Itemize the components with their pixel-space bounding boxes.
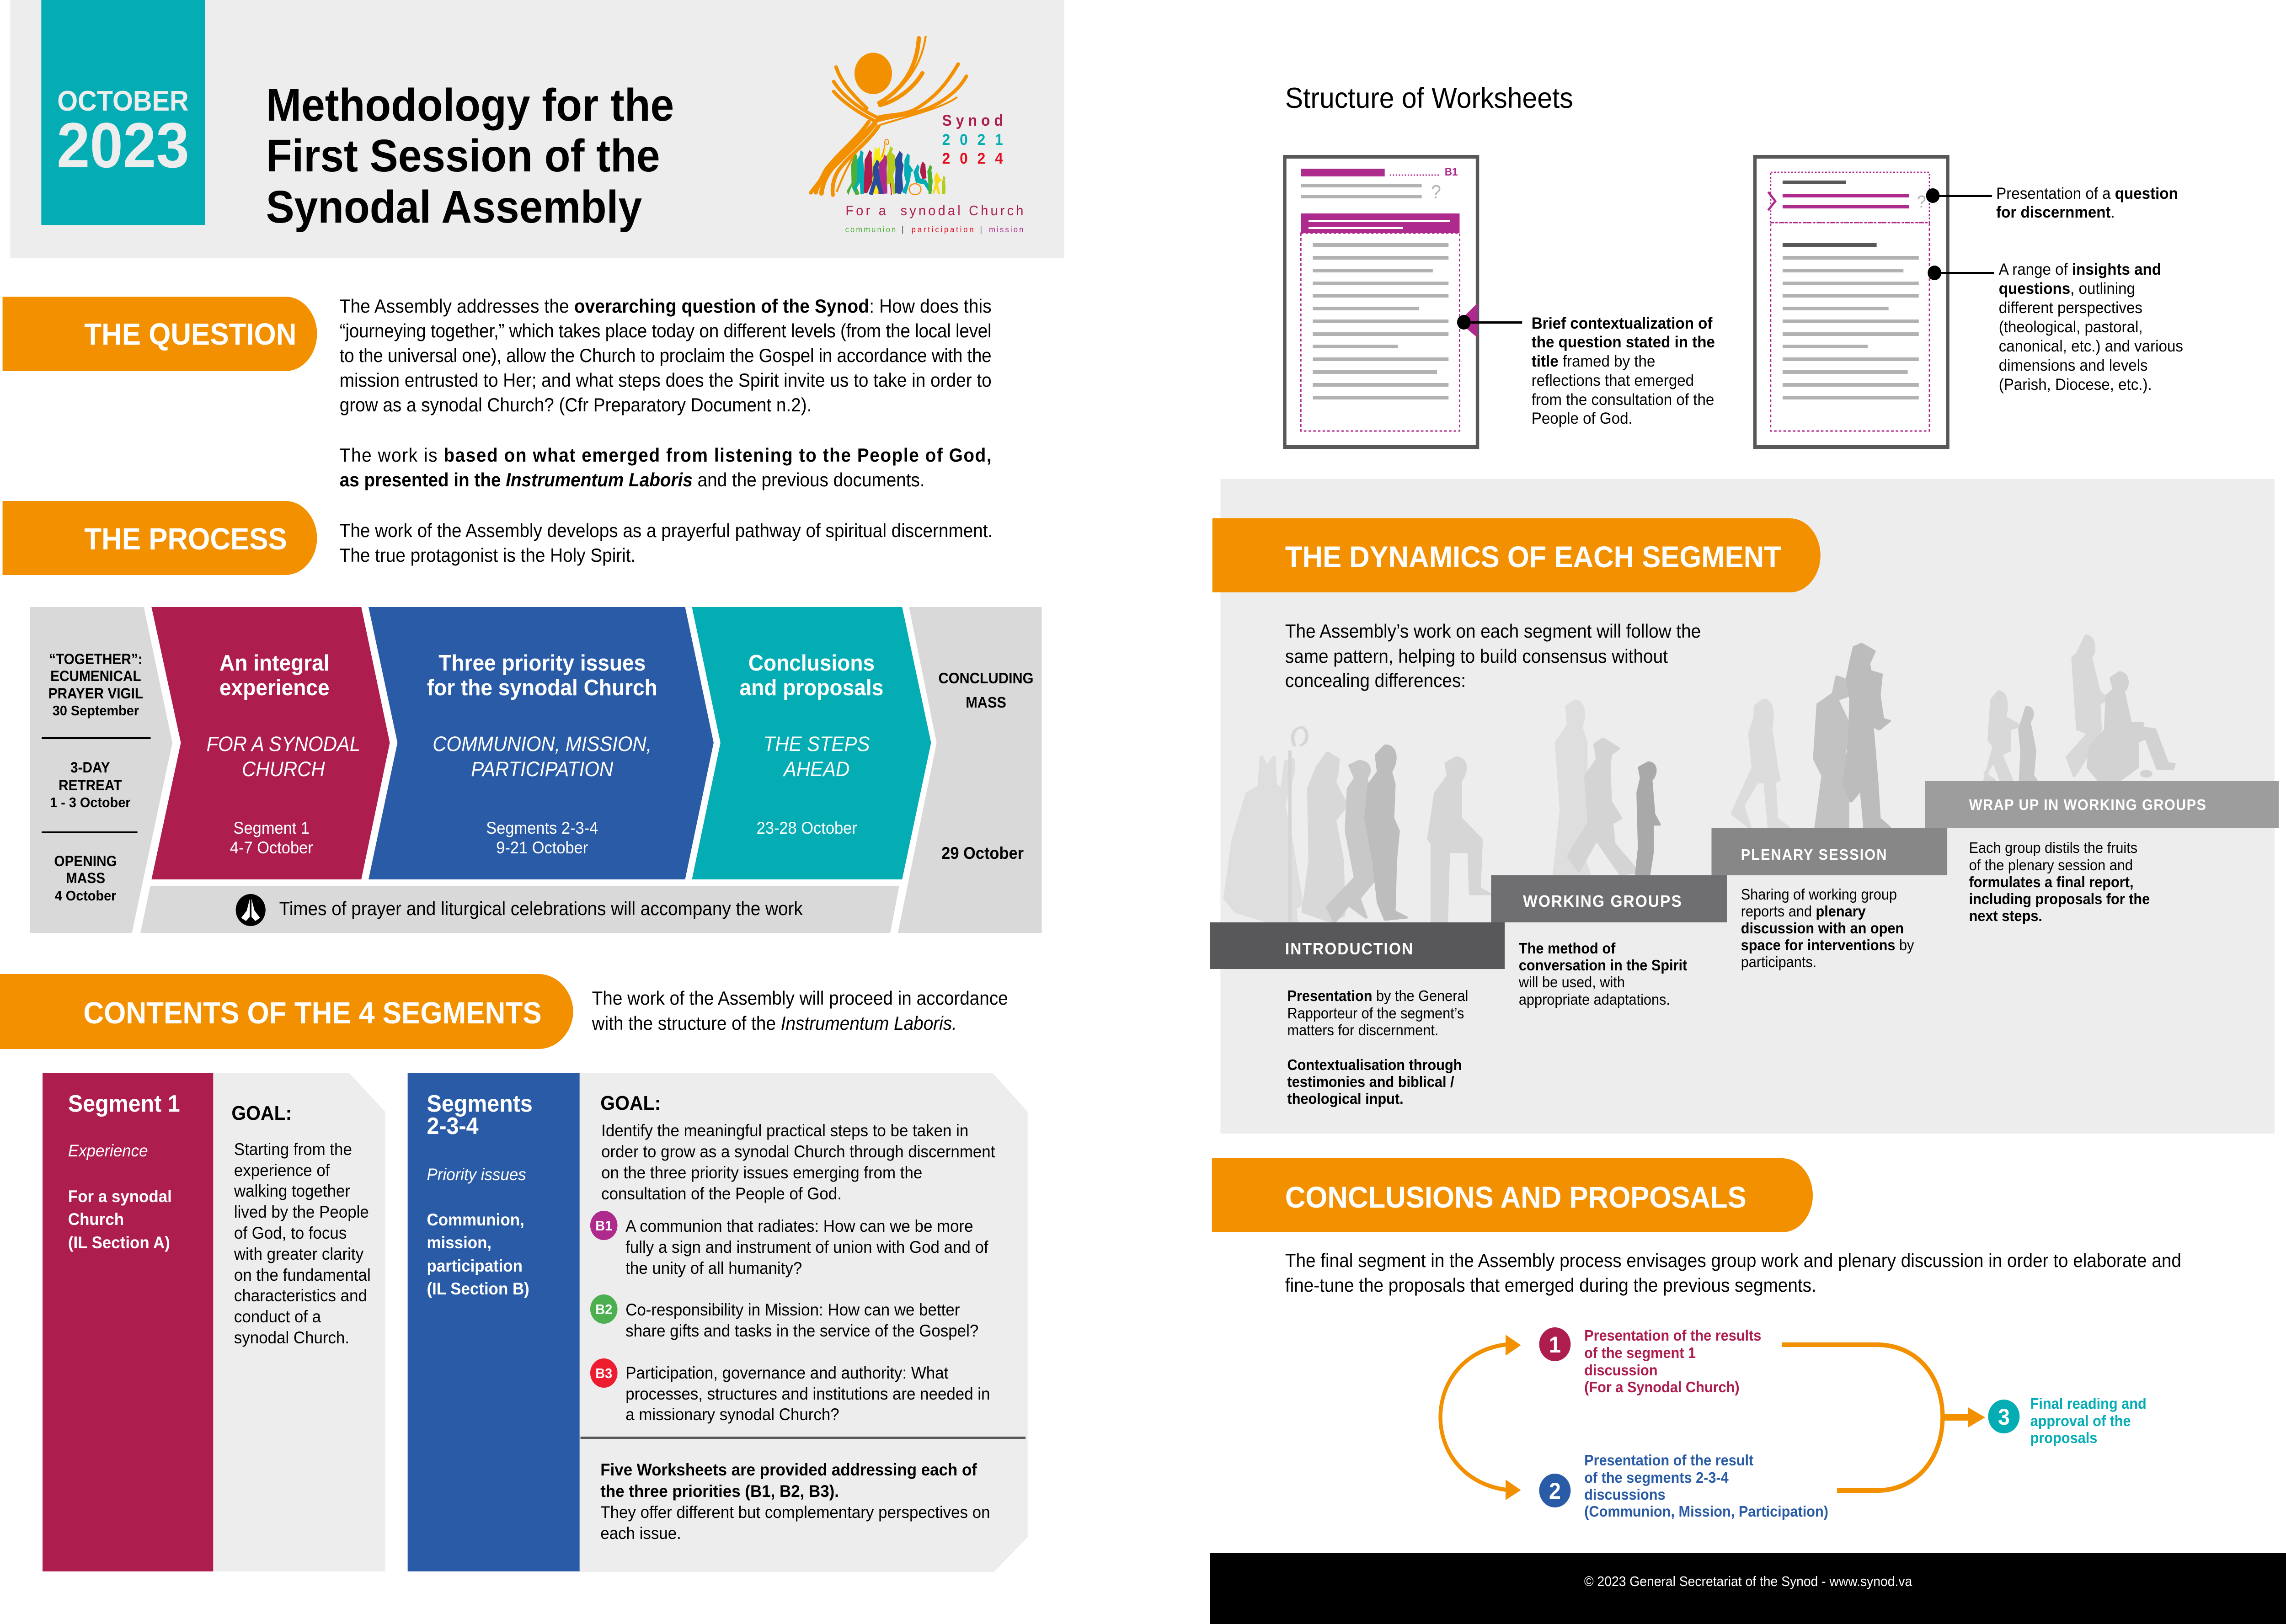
- panel: dynamics of each segment: [1210, 479, 2279, 1134]
- text block: segments goal: consultation of the People of God.: [601, 1184, 842, 1203]
- worksheet diagram 1: B1: [1445, 165, 1458, 178]
- step 2: of the segments 2-3-4: [1584, 1469, 1729, 1486]
- panel: segments 2-3-4 arrow: 9-21 October: [496, 838, 588, 857]
- panel: segment 1: GOAL:: [231, 1102, 292, 1124]
- text block: contents intro: with the structure of the Instrumentum Laboris.: [592, 1013, 957, 1034]
- step 3: approval of the: [2030, 1412, 2131, 1429]
- step 1: of the segment 1: [1584, 1344, 1696, 1361]
- panel: segments 2-3-4: mission,: [427, 1233, 491, 1252]
- process diagram: [30, 607, 1042, 933]
- title: First Session of the: [266, 131, 660, 181]
- panel: concluding mass: CONCLUDING: [939, 670, 1034, 687]
- step 1: Presentation of the results: [1584, 1327, 1761, 1344]
- logo: Synod 2021-2024: mission: [989, 224, 1023, 234]
- text block: the question: “journeying together,” which takes place today on different levels (from the local level: [340, 320, 992, 341]
- panel: segment 1 arrow: An integral: [219, 651, 330, 676]
- logo: Synod 2021-2024: participation: [912, 224, 974, 234]
- panel: segments 2-3-4: [408, 1073, 1028, 1572]
- step: plenary session: reports and plenary: [1741, 903, 1866, 920]
- text block: the question: to the universal one), allow the Church to proclaim the Gospel in accordance with the: [340, 345, 992, 366]
- step 1: discussion: [1584, 1362, 1658, 1379]
- priority B1: A communion that radiates: How can we be more: [625, 1216, 973, 1235]
- worksheet diagram 1: [1285, 157, 1522, 447]
- priority B1: B1: [595, 1218, 612, 1234]
- priority B2: [590, 1294, 978, 1340]
- step: wrap up in working groups: next steps.: [1969, 907, 2042, 924]
- step 2: 2: [1549, 1478, 1561, 1504]
- text block: dynamics intro: concealing differences:: [1285, 670, 1466, 691]
- worksheet diagram 2: [1755, 157, 1994, 447]
- text block: contents intro: The work of the Assembly will proceed in accordance: [592, 988, 1008, 1009]
- panel: before the segments: 4 October: [55, 888, 117, 904]
- worksheet callout 1: People of God.: [1532, 410, 1633, 427]
- worksheet callout 2: [1996, 185, 2178, 221]
- worksheet callout 3: (theological, pastoral,: [1999, 318, 2143, 336]
- panel: conclusions arrow: Conclusions: [748, 651, 875, 676]
- step: plenary session: PLENARY SESSION: [1741, 846, 1887, 863]
- panel: segment 1 arrow: experience: [219, 676, 330, 700]
- worksheet callout 3: (Parish, Diocese, etc.).: [1999, 376, 2152, 394]
- panel: before the segments: 1 - 3 October: [50, 795, 131, 810]
- arrow: left loop: [1441, 1335, 1521, 1500]
- priority B1: [590, 1211, 989, 1278]
- panel: segments 2-3-4: Communion,: [427, 1210, 524, 1229]
- logo: Synod 2021-2024: |: [902, 224, 904, 234]
- text block: segment 1 goal: lived by the People: [234, 1202, 369, 1221]
- panel: segments 2-3-4 arrow: [369, 607, 714, 879]
- text block: segment 1 goal: of God, to focus: [234, 1223, 347, 1242]
- step: working groups: will be used, with: [1518, 974, 1625, 990]
- step: introduction: [1210, 922, 1505, 1107]
- conclusions flow diagram: [1441, 1327, 2147, 1520]
- panel: concluding mass: 29 October: [941, 844, 1024, 863]
- text block: the process: [340, 520, 993, 566]
- heading pill: contents of the 4 segments: [0, 974, 573, 1049]
- text block: conclusions: fine-tune the proposals that emerged during the previous segments.: [1285, 1275, 1816, 1296]
- text block: the process: The true protagonist is the Holy Spirit.: [340, 545, 636, 566]
- date box: [41, 0, 205, 225]
- step: introduction: Contextualisation through: [1287, 1056, 1462, 1073]
- text block: segments goal: Identify the meaningful practical steps to be taken in: [601, 1121, 968, 1140]
- panel: before the segments: 30 September: [53, 703, 139, 719]
- panel: segments 2-3-4: 2-3-4: [427, 1113, 479, 1139]
- text block: segment 1 goal: experience of: [234, 1161, 330, 1180]
- heading pill: contents of the 4 segments: CONTENTS OF THE 4 SEGMENTS: [83, 996, 542, 1030]
- step: working groups: The method of: [1519, 940, 1616, 957]
- priority B2: B2: [595, 1302, 612, 1317]
- panel: segments 2-3-4 arrow: Segments 2-3-4: [486, 819, 598, 837]
- panel: segment 1 arrow: [151, 607, 390, 879]
- worksheet diagram 1: ?: [1431, 181, 1441, 202]
- panel: prayer strip: Times of prayer and liturgical celebrations will accompany the work: [279, 898, 803, 919]
- worksheet callout 1: from the consultation of the: [1532, 391, 1714, 409]
- text block: segment 1 goal: characteristics and: [234, 1286, 367, 1305]
- worksheet callout 1: Brief contextualization of: [1532, 314, 1713, 332]
- step: wrap up in working groups: WRAP UP IN WORKING GROUPS: [1969, 796, 2206, 813]
- text block: the question: grow as a synodal Church? (Cfr Preparatory Document n.2).: [340, 394, 812, 415]
- logo: Synod 2021-2024: [811, 37, 1023, 234]
- panel: segment 1 arrow: CHURCH: [242, 758, 325, 781]
- priority B3: B3: [595, 1366, 612, 1381]
- worksheet callout 3: dimensions and levels: [1999, 357, 2148, 374]
- step 3: proposals: [2030, 1429, 2097, 1446]
- step 1: 1: [1549, 1332, 1561, 1358]
- panel: before the segments: OPENING: [54, 853, 117, 869]
- date box: 2023: [57, 110, 189, 181]
- worksheet diagram 2: ?: [1917, 192, 1926, 211]
- text block: segment 1 goal: synodal Church.: [234, 1328, 349, 1347]
- panel: segments 2-3-4: Segments: [427, 1090, 533, 1117]
- worksheet callout 1: [1532, 314, 1715, 427]
- worksheet callout 2: for discernment.: [1996, 203, 2115, 221]
- worksheet callout 3: A range of insights and: [1999, 261, 2161, 278]
- step: plenary session: [1711, 828, 1947, 970]
- text block: five worksheets: the three priorities (B1, B2, B3).: [600, 1481, 839, 1501]
- arrow: right loop to final step: [1782, 1345, 1985, 1491]
- panel: segment 1 arrow: Segment 1: [234, 819, 310, 837]
- panel: before the segments: 3-DAY: [70, 759, 110, 776]
- text block: conclusions: [1285, 1250, 2181, 1296]
- step: plenary session: Sharing of working group: [1741, 886, 1897, 903]
- priority B3: Participation, governance and authority: What: [625, 1363, 948, 1382]
- text block: dynamics intro: same pattern, helping to build consensus without: [1285, 646, 1668, 667]
- panel: conclusions arrow: [692, 607, 931, 879]
- title: Methodology for the: [266, 80, 674, 131]
- panel: segment 1: For a synodal: [68, 1187, 172, 1206]
- panel: segment 1 arrow: 4-7 October: [230, 838, 313, 857]
- priority B2: Co-responsibility in Mission: How can we better: [625, 1300, 960, 1319]
- step: plenary session: participants.: [1741, 953, 1816, 970]
- text block: segment 1 goal: conduct of a: [234, 1307, 321, 1326]
- text block: contents intro: [592, 988, 1008, 1034]
- title: Synodal Assembly: [266, 182, 642, 233]
- text block: dynamics intro: The Assembly’s work on each segment will follow the: [1285, 621, 1701, 642]
- priority B1: the unity of all humanity?: [625, 1258, 802, 1278]
- priority B3: a missionary synodal Church?: [625, 1405, 839, 1424]
- logo: Synod 2021-2024: For a synodal Church: [845, 203, 1023, 218]
- step: wrap up in working groups: [1925, 781, 2279, 924]
- text block: segment 1 goal: with greater clarity: [234, 1244, 364, 1263]
- panel: segments 2-3-4 arrow: COMMUNION, MISSION,: [433, 733, 652, 756]
- logo: Synod 2021-2024: 2021: [942, 131, 1003, 148]
- step: wrap up in working groups: Each group distils the fruits: [1969, 839, 2137, 856]
- step: introduction: matters for discernment.: [1287, 1022, 1438, 1038]
- text block: conclusions: The final segment in the Assembly process envisages group work and plenary discussion in order to elaborate and: [1285, 1250, 2181, 1271]
- text block: segment 1 goal: walking together: [234, 1181, 350, 1200]
- worksheet callout 1: reflections that emerged: [1532, 372, 1694, 389]
- step: introduction: theological input.: [1287, 1090, 1404, 1107]
- step 2: [1539, 1452, 1828, 1520]
- priority B3: processes, structures and institutions are needed in: [625, 1384, 990, 1403]
- panel: before the segments: ECUMENICAL: [50, 668, 141, 684]
- panel: segments 2-3-4: GOAL:: [600, 1092, 661, 1114]
- step 3: 3: [1998, 1404, 2010, 1430]
- logo: Synod 2021-2024: |: [980, 224, 982, 234]
- heading pill: dynamics: THE DYNAMICS OF EACH SEGMENT: [1285, 540, 1781, 574]
- text block: the process: The work of the Assembly develops as a prayerful pathway of spiritual discernment.: [340, 520, 993, 541]
- worksheet callout 2: Presentation of a question: [1996, 185, 2178, 202]
- text block: five worksheets: [600, 1460, 990, 1543]
- title: [266, 80, 674, 233]
- step: plenary session: discussion with an open: [1741, 920, 1904, 937]
- panel: segments 2-3-4: participation: [427, 1256, 523, 1275]
- panel: segment 1: Experience: [68, 1141, 148, 1160]
- panel: segments 2-3-4 arrow: PARTICIPATION: [471, 758, 614, 781]
- text block: five worksheets: each issue.: [600, 1523, 681, 1543]
- silhouettes: walking people on steps: [1225, 635, 2174, 922]
- panel: segments 2-3-4: (IL Section B): [427, 1279, 529, 1298]
- header band: [10, 0, 1064, 258]
- panel: segment 1: (IL Section A): [68, 1233, 170, 1252]
- panel: segment 1 arrow: FOR A SYNODAL: [207, 733, 360, 756]
- panel: before the segments: PRAYER VIGIL: [48, 685, 143, 702]
- panel: before the segments: RETREAT: [59, 777, 122, 793]
- step: working groups: WORKING GROUPS: [1523, 893, 1682, 911]
- step: wrap up in working groups: including proposals for the: [1969, 890, 2150, 907]
- step 3: [1988, 1395, 2147, 1446]
- panel: segments 2-3-4: Priority issues: [427, 1165, 526, 1184]
- footer: [1210, 1553, 2286, 1624]
- text block: five worksheets: They offer different but complementary perspectives on: [600, 1502, 990, 1522]
- footer: © 2023 General Secretariat of the Synod - www.synod.va: [1584, 1574, 1912, 1589]
- panel: conclusions arrow: and proposals: [740, 676, 883, 700]
- step 2: (Communion, Mission, Participation): [1584, 1503, 1828, 1520]
- heading pill: the question: THE QUESTION: [84, 317, 296, 351]
- panel: prayer strip: [140, 886, 899, 933]
- heading: structure of worksheets: Structure of Worksheets: [1285, 82, 1573, 114]
- step: working groups: appropriate adaptations.: [1519, 991, 1670, 1008]
- panel: segments 2-3-4 arrow: for the synodal Church: [427, 676, 657, 700]
- panel: concluding mass: [898, 607, 1042, 933]
- priority B2: share gifts and tasks in the service of the Gospel?: [625, 1321, 978, 1340]
- worksheet callout 3: questions, outlining: [1999, 280, 2135, 298]
- priority B3: [590, 1358, 990, 1424]
- step 2: discussions: [1584, 1486, 1666, 1503]
- worksheet callout 3: different perspectives: [1999, 299, 2142, 317]
- step: plenary session: space for interventions by: [1741, 937, 1914, 953]
- step 3: Final reading and: [2030, 1395, 2147, 1412]
- panel: before the segments: [30, 607, 172, 933]
- step: introduction: Presentation by the General: [1287, 987, 1468, 1004]
- step: introduction: INTRODUCTION: [1285, 940, 1414, 958]
- panel: segment 1: Segment 1: [68, 1090, 180, 1117]
- panel: segment 1: [43, 1073, 385, 1571]
- heading pill: the question: [3, 297, 317, 371]
- worksheet callout 3: canonical, etc.) and various: [1999, 337, 2183, 355]
- heading pill: the process: [3, 501, 317, 575]
- text block: segment 1 goal: [234, 1139, 371, 1347]
- step: working groups: conversation in the Spirit: [1519, 957, 1688, 974]
- heading pill: conclusions and proposals: [1212, 1158, 1813, 1232]
- logo: Synod 2021-2024: 2024: [942, 149, 1003, 167]
- heading pill: conclusions and proposals: CONCLUSIONS AND PROPOSALS: [1285, 1180, 1747, 1214]
- step: wrap up in working groups: formulates a final report,: [1969, 873, 2134, 890]
- heading pill: dynamics: [1212, 518, 1821, 592]
- panel: segment 1: Church: [68, 1209, 124, 1229]
- step: working groups: [1491, 875, 1727, 1008]
- step 1: (For a Synodal Church): [1584, 1379, 1740, 1395]
- text block: segment 1 goal: Starting from the: [234, 1139, 352, 1159]
- worksheet callout 3: [1999, 261, 2183, 394]
- step: introduction: Rapporteur of the segment’s: [1287, 1005, 1464, 1022]
- logo: Synod 2021-2024: Synod: [942, 112, 1003, 129]
- icon: praying hands: [236, 894, 266, 926]
- panel: before the segments: MASS: [66, 870, 105, 886]
- text block: segments goal: on the three priority issues emerging from the: [601, 1163, 922, 1182]
- text block: the question: as presented in the Instrumentum Laboris and the previous documents.: [340, 469, 925, 490]
- text block: the question: The Assembly addresses the overarching question of the Synod: How does this: [340, 296, 992, 317]
- panel: conclusions arrow: THE STEPS: [764, 733, 870, 756]
- panel: conclusions arrow: 23-28 October: [757, 819, 857, 837]
- text block: the question: mission entrusted to Her; and what steps does the Spirit invite us to take in order to: [340, 370, 992, 391]
- worksheet callout 1: title framed by the: [1532, 352, 1655, 370]
- step 2: Presentation of the result: [1584, 1452, 1754, 1469]
- heading pill: the process: THE PROCESS: [84, 522, 287, 556]
- date box: OCTOBER: [57, 85, 189, 117]
- text block: segment 1 goal: on the fundamental: [234, 1265, 371, 1284]
- panel: before the segments: “TOGETHER”:: [49, 651, 143, 667]
- text block: five worksheets: Five Worksheets are provided addressing each of: [600, 1460, 977, 1479]
- worksheet callout 1: the question stated in the: [1532, 333, 1715, 351]
- logo: Synod 2021-2024: communion: [845, 224, 896, 234]
- panel: segments 2-3-4 arrow: Three priority issues: [438, 651, 646, 676]
- panel: concluding mass: MASS: [966, 694, 1006, 711]
- text block: segments goal: [601, 1121, 995, 1203]
- step 1: [1539, 1327, 1761, 1395]
- text block: segments goal: order to grow as a synodal Church through discernment: [601, 1142, 995, 1161]
- text block: the question: The work is based on what emerged from listening to the People of God,: [340, 445, 992, 466]
- text block: dynamics intro: [1285, 621, 1701, 691]
- text block: the question: [340, 296, 992, 490]
- priority B1: fully a sign and instrument of union with God and of: [625, 1237, 989, 1257]
- step: introduction: testimonies and biblical /: [1287, 1073, 1454, 1090]
- step: wrap up in working groups: of the plenary session and: [1969, 857, 2133, 873]
- panel: conclusions arrow: AHEAD: [782, 758, 849, 781]
